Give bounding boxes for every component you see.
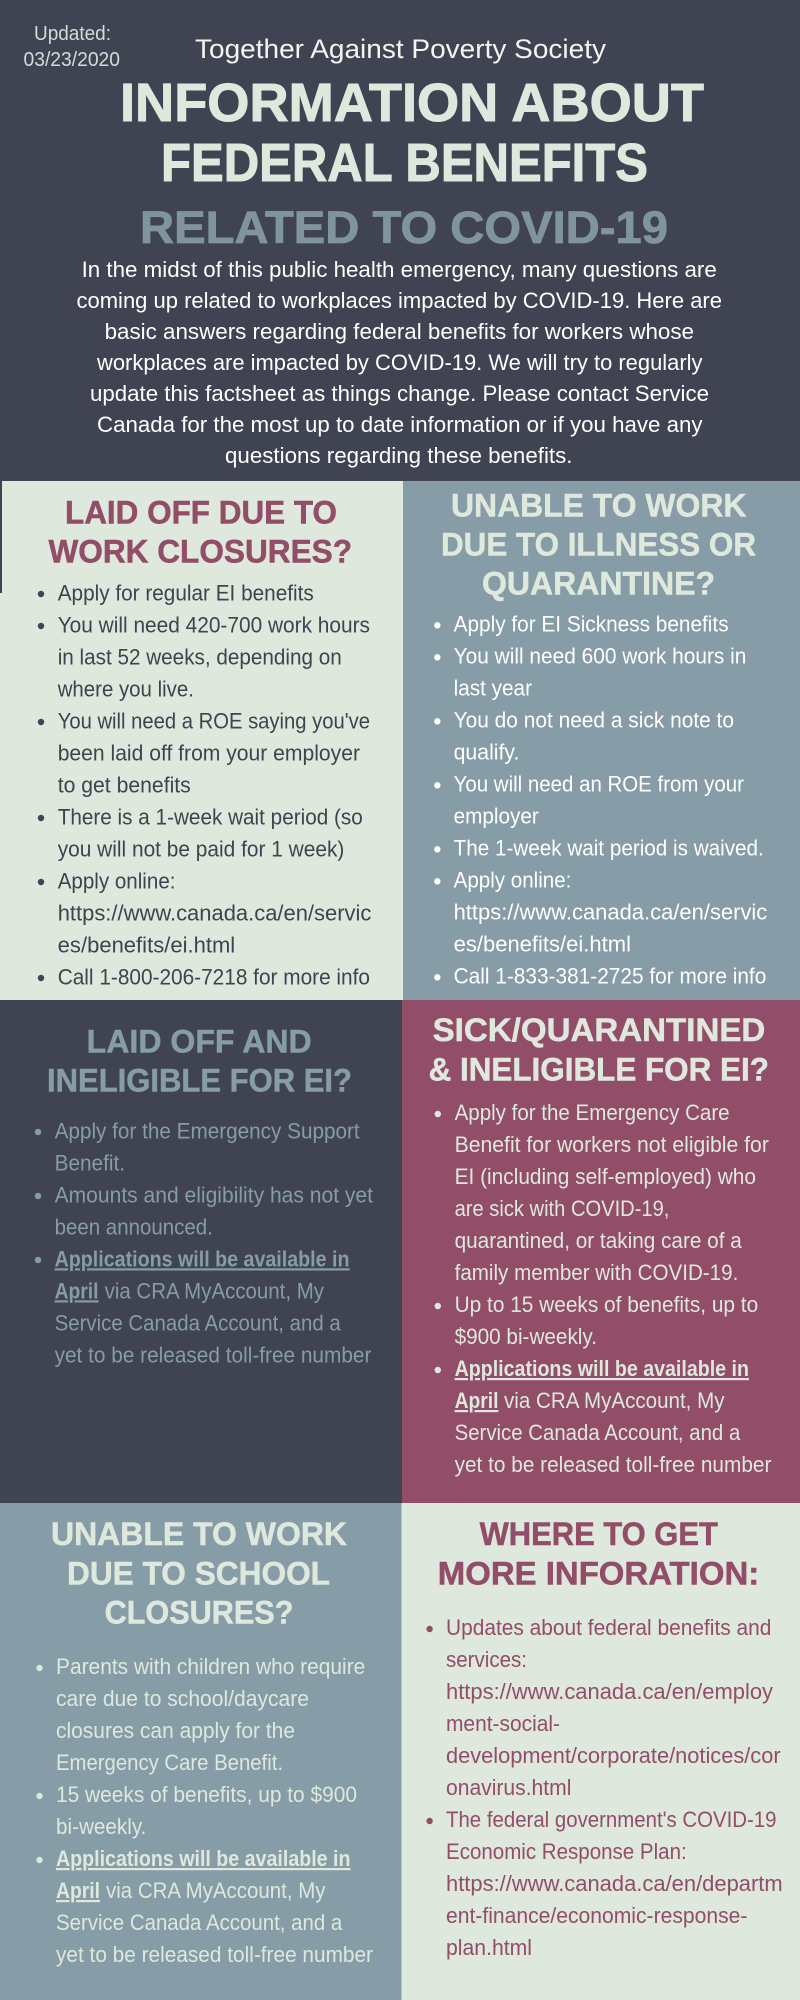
bullet list: EI benefits: you will not be paid for 1 week) xyxy=(58,836,344,861)
panel: laid off due to work closures xyxy=(0,481,403,1000)
bullet list: links: https://www.canada.ca/en/employ xyxy=(446,1679,773,1704)
bullet list: links: Economic Response Plan: xyxy=(446,1839,687,1864)
bullet list: emergency support benefit: April xyxy=(55,1278,98,1303)
bullet list: emergency care benefit: EI (including self-employed) who xyxy=(455,1164,756,1189)
updated date: 03/23/2020 xyxy=(24,49,120,71)
intro paragraph: coming up related to workplaces impacted by COVID-19. Here are xyxy=(76,288,722,313)
bullet list: EI sickness benefits: You will need 600 work hours in xyxy=(454,644,746,668)
bullet list: emergency support benefit: via CRA MyAccount, My xyxy=(105,1278,324,1303)
bullet list: emergency care benefit: Applications will be available in xyxy=(455,1356,749,1381)
bullet list: links: plan.html xyxy=(446,1935,532,1960)
panel: unable to work due to illness or quarantine xyxy=(403,481,800,1000)
bullet list: school closures: bi-weekly. xyxy=(56,1814,146,1839)
bullet list: school closures xyxy=(36,1654,373,1967)
bullet list: emergency care benefit: Benefit for workers not eligible for xyxy=(455,1132,769,1157)
heading: sick or quarantined and ineligible for EI: & INELIGIBLE FOR EI? xyxy=(429,1052,769,1088)
bullet list: emergency care benefit: yet to be released toll-free number xyxy=(455,1452,771,1477)
heading: where to get more information: MORE INFORATION: xyxy=(438,1555,759,1591)
bullet list: EI benefits: to get benefits xyxy=(58,772,191,797)
heading: unable to work due to illness or quarantine: DUE TO ILLNESS OR xyxy=(441,526,756,562)
bullet list: emergency care benefit: Up to 15 weeks of benefits, up to xyxy=(455,1292,758,1317)
bullet list: EI benefits: You will need a ROE saying you've xyxy=(58,708,370,733)
bullet list: links: Updates about federal benefits and xyxy=(446,1615,771,1640)
bullet list: emergency care benefit: via CRA MyAccount, My xyxy=(504,1388,724,1413)
bullet list: emergency support benefit xyxy=(35,1118,373,1367)
bullet list: emergency support benefit: yet to be released toll-free number xyxy=(55,1342,371,1367)
bullet list: EI sickness benefits: Call 1-833-381-2725 for more info xyxy=(454,964,766,988)
bullet list: EI sickness benefits: The 1-week wait period is waived. xyxy=(454,836,764,860)
heading: unable to work due to school closures: CLOSURES? xyxy=(105,1594,293,1630)
bullet list: emergency care benefit: Service Canada Account, and a xyxy=(455,1420,741,1445)
bullet list: EI sickness benefits: Apply online: xyxy=(454,868,571,892)
heading: laid off and ineligible for EI: LAID OFF AND xyxy=(87,1023,312,1059)
heading: unable to work due to school closures: DUE TO SCHOOL xyxy=(67,1555,330,1591)
bullet list: EI benefits: Call 1-800-206-7218 for more info xyxy=(58,964,370,989)
bullet list: emergency care benefit: family member with COVID-19. xyxy=(455,1260,738,1285)
organisation name: Together Against Poverty Society xyxy=(195,34,607,64)
bullet list: EI benefits: There is a 1-week wait period (so xyxy=(58,804,363,829)
intro paragraph: update this factsheet as things change. Please contact Service xyxy=(90,381,709,406)
bullet list: EI sickness benefits: Apply for EI Sickness benefits xyxy=(454,612,729,636)
bullet list: EI benefits: https://www.canada.ca/en/servic xyxy=(58,900,371,925)
heading: unable to work due to school closures: UNABLE TO WORK xyxy=(51,1516,347,1552)
bullet list: emergency support benefit: Benefit. xyxy=(55,1150,125,1175)
bullet list: emergency support benefit: Applications will be available in xyxy=(55,1246,349,1271)
bullet list: EI benefits xyxy=(38,580,371,989)
title: FEDERAL BENEFITS xyxy=(161,133,648,193)
bullet list: emergency care benefit: April xyxy=(455,1388,498,1413)
heading: laid off and ineligible for EI xyxy=(47,1023,352,1099)
bullet list: emergency care benefit: Apply for the Emergency Care xyxy=(455,1100,730,1125)
intro paragraph: questions regarding these benefits. xyxy=(225,443,572,468)
bullet list: EI benefits: Apply for regular EI benefits xyxy=(58,580,314,605)
subtitle: RELATED TO COVID-19 xyxy=(140,202,668,253)
heading: sick or quarantined and ineligible for EI xyxy=(429,1012,769,1088)
panel: unable to work due to school closures xyxy=(0,1503,402,2000)
bullet list: EI benefits: You will need 420-700 work hours xyxy=(58,612,370,637)
heading: unable to work due to illness or quarantine xyxy=(441,488,756,602)
intro paragraph: basic answers regarding federal benefits for workers whose xyxy=(105,319,694,344)
bullet list: links: development/corporate/notices/cor xyxy=(446,1743,781,1768)
bullet list: emergency support benefit: Service Canada Account, and a xyxy=(55,1310,341,1335)
bullet list: EI sickness benefits: employer xyxy=(454,804,539,828)
bullet list: school closures: Service Canada Account, and a xyxy=(56,1910,343,1935)
intro paragraph xyxy=(76,257,722,468)
bullet list: emergency care benefit: quarantined, or taking care of a xyxy=(455,1228,743,1253)
heading: where to get more information xyxy=(438,1516,759,1591)
bullet list: emergency support benefit: been announced. xyxy=(55,1214,213,1239)
bullet list: links: onavirus.html xyxy=(446,1775,571,1800)
bullet list: EI sickness benefits: You do not need a sick note to xyxy=(454,708,734,732)
bullet list: EI sickness benefits: last year xyxy=(454,676,532,700)
panel: where to get more information xyxy=(402,1503,800,2000)
heading: laid off and ineligible for EI: INELIGIBLE FOR EI? xyxy=(47,1063,352,1099)
bullet list: EI sickness benefits: You will need an ROE from your xyxy=(454,772,744,796)
panel: sick or quarantined and ineligible for EI xyxy=(402,1000,800,1503)
bullet list: EI benefits: where you live. xyxy=(57,676,194,701)
bullet list: EI sickness benefits: es/benefits/ei.html xyxy=(454,932,631,956)
bullet list: links xyxy=(426,1615,783,1960)
bullet list: EI benefits: in last 52 weeks, depending on xyxy=(58,644,342,669)
heading: unable to work due to school closures xyxy=(51,1516,347,1630)
bullet list: EI sickness benefits: qualify. xyxy=(454,740,519,764)
bullet list: school closures: closures can apply for the xyxy=(56,1718,295,1743)
title: INFORMATION ABOUT xyxy=(120,73,704,133)
updated date xyxy=(24,23,120,71)
intro paragraph: Canada for the most up to date information or if you have any xyxy=(97,412,702,437)
bullet list: links: ent-finance/economic-response- xyxy=(446,1903,747,1928)
bullet list: EI sickness benefits xyxy=(434,612,767,988)
panel: laid off and ineligible for EI xyxy=(0,1000,402,1503)
heading: laid off due to work closures: WORK CLOSURES? xyxy=(48,533,352,569)
bullet list: school closures: Parents with children who require xyxy=(56,1654,365,1679)
bullet list: emergency care benefit: are sick with COVID-19, xyxy=(455,1196,669,1221)
bullet list: emergency support benefit: Apply for the Emergency Support xyxy=(55,1118,360,1143)
bullet list: emergency care benefit: $900 bi-weekly. xyxy=(455,1324,597,1349)
bullet list: links: services: xyxy=(446,1647,527,1672)
heading: unable to work due to illness or quarantine: UNABLE TO WORK xyxy=(451,488,746,524)
bullet list: school closures: care due to school/daycare xyxy=(56,1686,309,1711)
bullet list: school closures: April xyxy=(56,1878,100,1903)
heading: where to get more information: WHERE TO GET xyxy=(480,1516,718,1552)
intro paragraph: In the midst of this public health emergency, many questions are xyxy=(82,257,717,282)
bullet list: EI sickness benefits: https://www.canada.ca/en/servic xyxy=(454,900,767,924)
heading: sick or quarantined and ineligible for EI: SICK/QUARANTINED xyxy=(433,1012,765,1048)
updated date: Updated: xyxy=(34,23,111,45)
bullet list: EI benefits: Apply online: xyxy=(58,868,176,893)
bullet list: emergency support benefit: Amounts and eligibility has not yet xyxy=(55,1182,373,1207)
heading: laid off due to work closures xyxy=(48,494,352,569)
heading: unable to work due to illness or quarantine: QUARANTINE? xyxy=(482,566,715,602)
bullet list: school closures: via CRA MyAccount, My xyxy=(106,1878,326,1903)
bullet list: school closures: 15 weeks of benefits, up to $900 xyxy=(56,1782,357,1807)
bullet list: links: The federal government's COVID-19 xyxy=(446,1807,776,1832)
bullet list: school closures: Emergency Care Benefit. xyxy=(56,1750,283,1775)
header panel xyxy=(0,0,800,481)
heading: laid off due to work closures: LAID OFF DUE TO xyxy=(65,494,337,530)
bullet list: links: https://www.canada.ca/en/departm xyxy=(446,1871,783,1896)
title xyxy=(120,73,704,193)
bullet list: EI benefits: es/benefits/ei.html xyxy=(58,932,235,957)
bullet list: EI benefits: been laid off from your employer xyxy=(58,740,360,765)
bullet list: school closures: yet to be released toll-free number xyxy=(56,1942,373,1967)
intro paragraph: workplaces are impacted by COVID-19. We will try to regularly xyxy=(96,350,703,375)
bullet list: school closures: Applications will be available in xyxy=(56,1846,350,1871)
bullet list: emergency care benefit xyxy=(435,1100,771,1477)
bullet list: links: ment-social- xyxy=(446,1711,560,1736)
